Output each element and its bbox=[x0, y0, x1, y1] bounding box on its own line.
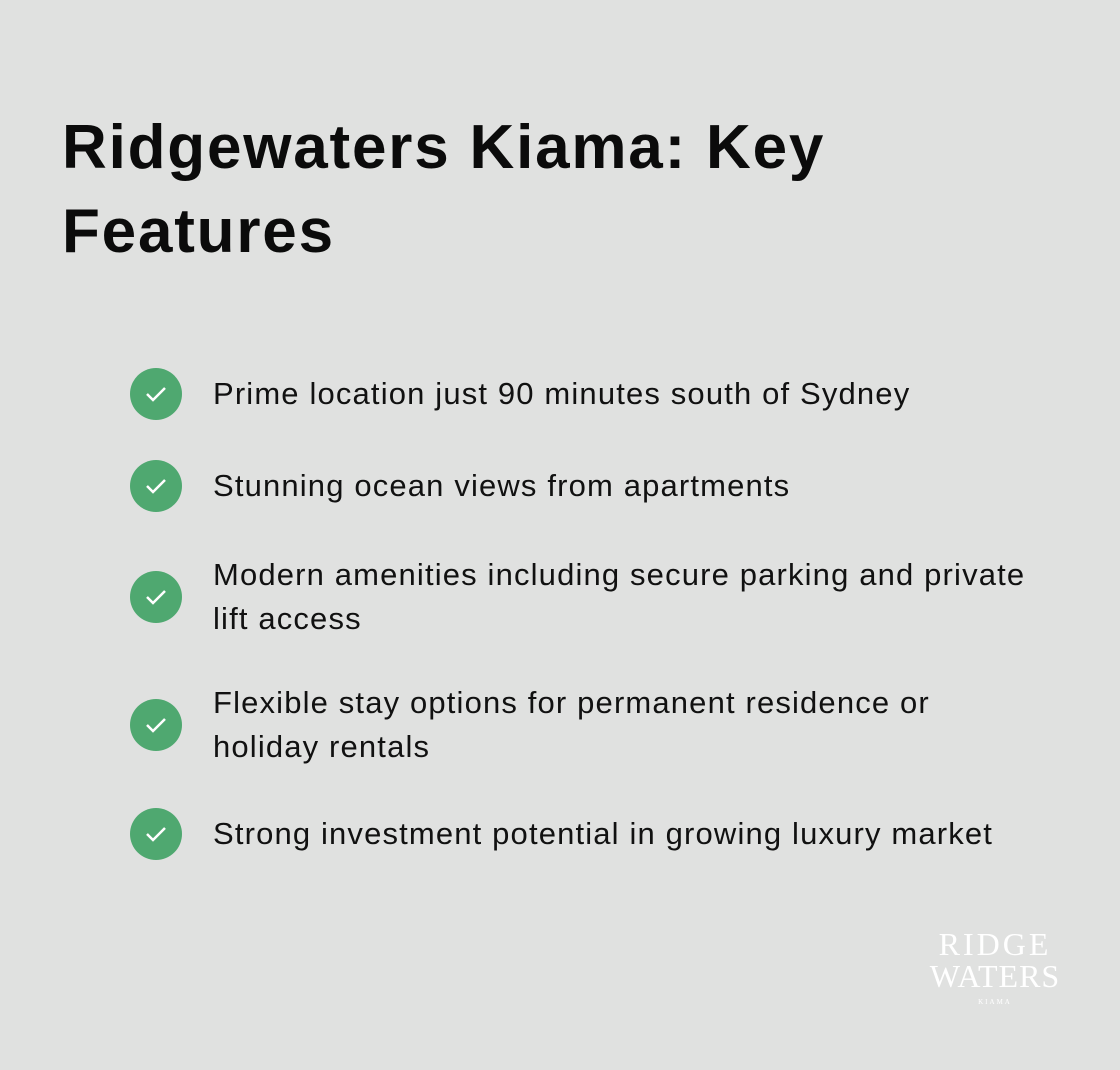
title: Ridgewaters Kiama: Key bbox=[62, 113, 825, 182]
item: amenities: Modern amenities including secure parking and private lift access bbox=[213, 557, 1025, 636]
title: Features bbox=[62, 197, 335, 266]
logo bbox=[930, 926, 1060, 1006]
logo: RIDGE bbox=[939, 926, 1051, 962]
title bbox=[62, 113, 825, 266]
item: location: Prime location just 90 minutes south of Sydney bbox=[213, 376, 910, 411]
item: views: Stunning ocean views from apartments bbox=[213, 468, 790, 503]
item: stay options: Flexible stay options for permanent residence or holiday rentals bbox=[213, 685, 930, 764]
logo: KIAMA bbox=[978, 998, 1012, 1006]
item: investment: Strong investment potential in growing luxury market bbox=[213, 816, 993, 851]
logo: WATERS bbox=[930, 958, 1060, 994]
item: investment bbox=[130, 808, 993, 860]
item: views bbox=[130, 460, 790, 512]
item: location bbox=[130, 368, 910, 420]
